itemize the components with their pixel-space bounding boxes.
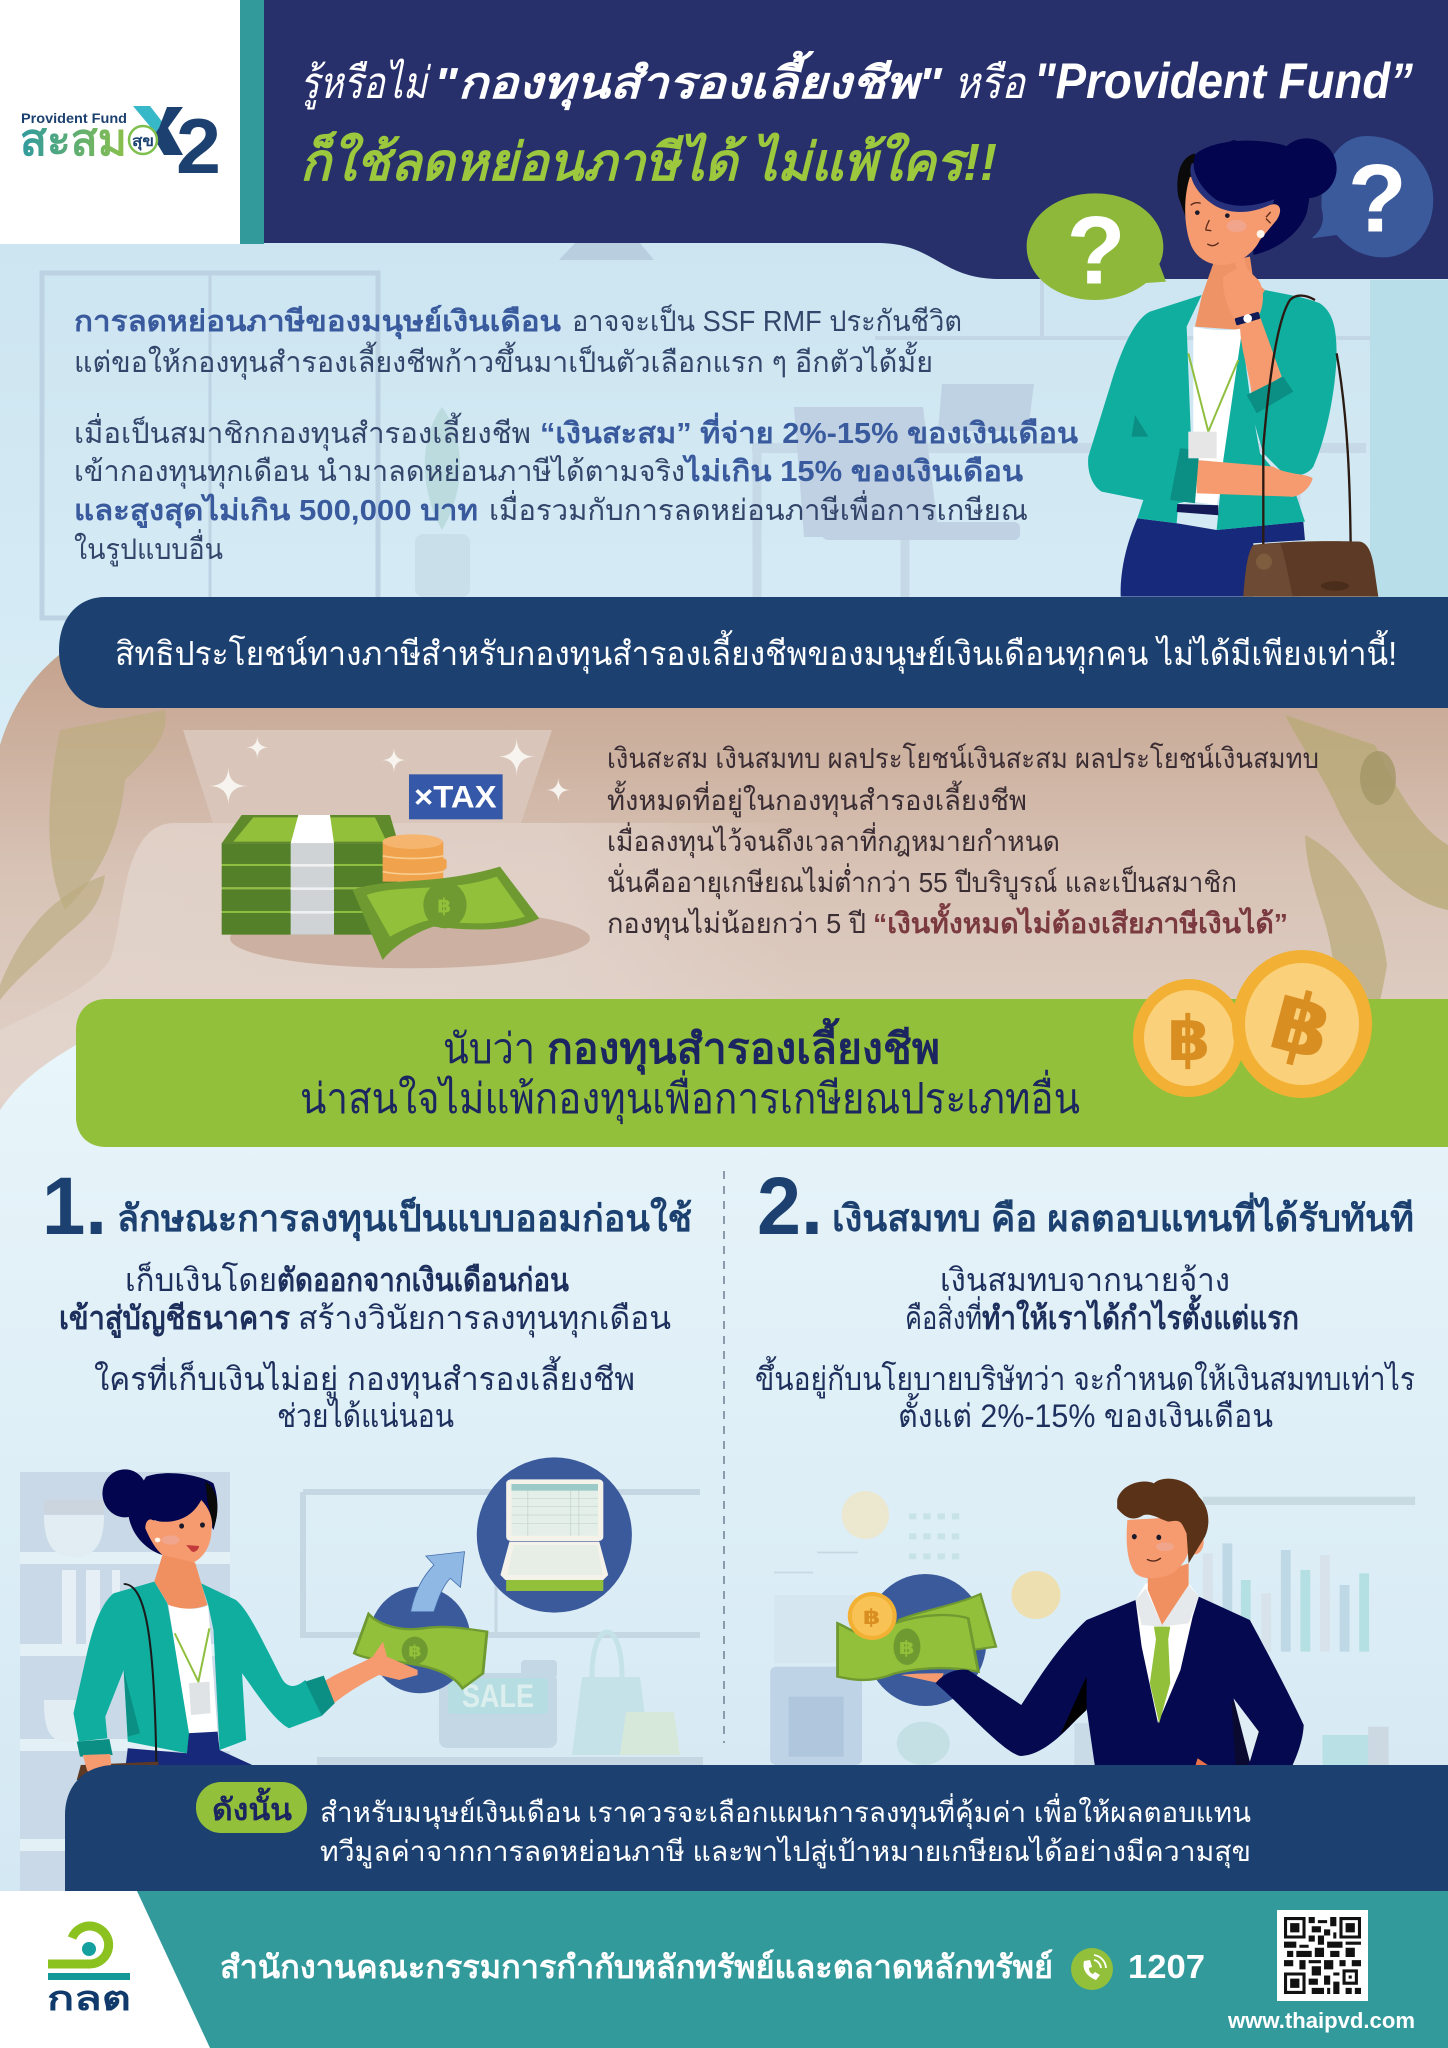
text block: intro: เข้ากองทุนทุกเดือน นำมาลดหย่อนภาษีได้ตามจริง	[74, 454, 685, 489]
column 1: body text: ใครที่เก็บเงินไม่อยู่ กองทุนสำรองเลี้ยงชีพ	[94, 1356, 635, 1399]
icon: green question bubble: ?	[1066, 197, 1126, 304]
column 2: body text	[755, 1262, 1415, 1434]
column 1: heading: ลักษณะการลงทุนเป็นแบบออมก่อนใช้	[117, 1195, 692, 1242]
icon: blue question bubble	[1312, 136, 1433, 257]
header: logo block: สะสม	[20, 116, 127, 165]
column 2: body text: เงินสมทบจากนายจ้าง	[940, 1262, 1230, 1298]
banner: tax benefits	[59, 597, 1448, 708]
callout: green conclusion band: น่าสนใจไม่แพ้กองทุนเพื่อการเกษียณประเภทอื่น	[300, 1070, 1080, 1125]
icon: gold coins: ฿	[1167, 1005, 1211, 1074]
column 2: body text: ตั้งแต่ 2%-15% ของเงินเดือน	[898, 1393, 1273, 1434]
header: navy band	[264, 0, 1448, 279]
footer: SEC logo	[0, 1891, 210, 2048]
column 1: body text: เก็บเงินโดย	[125, 1261, 277, 1298]
column 1: body text: ช่วยได้แน่นอน	[277, 1398, 454, 1434]
text block: tax-free conditions: เงินสะสม เงินสมทบ ผลประโยชน์เงินสะสม ผลประโยชน์เงินสมทบ	[607, 742, 1319, 774]
column 2: body text: คือสิ่งที่	[905, 1296, 982, 1336]
title: "กองทุนสำรองเลี้ยงชีพ"	[434, 50, 943, 111]
icon: phone	[1071, 1948, 1113, 1990]
website: www.thaipvd.com	[1227, 2008, 1415, 2033]
illustration: tax-free money: ×TAX	[414, 779, 497, 815]
illustration: tax-free money: ฿	[437, 896, 451, 918]
column 2: body text: ทำให้เราได้กำไรตั้งแต่แรก	[982, 1294, 1299, 1336]
text block: tax-free conditions: ทั้งหมดที่อยู่ในกองทุนสำรองเลี้ยงชีพ	[607, 780, 1027, 818]
text block: intro	[74, 303, 1078, 567]
footer: office name: สำนักงานคณะกรรมการกำกับหลักทรัพย์และตลาดหลักทรัพย์	[220, 1949, 1053, 1985]
text block: tax-free conditions	[607, 742, 1319, 941]
callout: green conclusion band	[76, 999, 1448, 1147]
footer: SEC logo: กลต	[47, 1980, 131, 2018]
text block: tax-free conditions: นั่นคืออายุเกษียณไม่ต่ำกว่า 55 ปีบริบูรณ์ และเป็นสมาชิก	[607, 863, 1237, 900]
header: logo block	[0, 0, 240, 244]
background: brown money band	[0, 655, 1448, 1147]
header: logo block: Provident Fund	[21, 110, 127, 126]
column 1: heading	[42, 1161, 692, 1252]
text block: intro: อาจจะเป็น SSF RMF ประกันชีวิต	[572, 303, 962, 338]
icon: blue question bubble: ?	[1348, 146, 1407, 253]
title	[300, 50, 1413, 192]
callout: green conclusion band: นับว่า	[443, 1025, 535, 1072]
illustration: woman with bank book: ฿	[408, 1642, 422, 1660]
icon: green question bubble	[1027, 193, 1166, 304]
column 1: body text: สร้างวินัยการลงทุนทุกเดือน	[298, 1300, 671, 1338]
text block: tax-free conditions: “เงินทั้งหมดไม่ต้องเสียภาษีเงินได้”	[873, 902, 1288, 939]
hotline number: 1207	[1128, 1948, 1205, 1985]
text block: intro: ไม่เกิน 15% ของเงินเดือน	[682, 454, 1023, 488]
footer band	[0, 1891, 1448, 2048]
text block: intro: และสูงสุดไม่เกิน 500,000 บาท	[74, 493, 478, 528]
text block: tax-free conditions: กองทุนไม่น้อยกว่า 5 ปี	[607, 908, 866, 941]
title: หรือ	[954, 59, 1026, 108]
header: logo block: 2	[176, 102, 221, 190]
illustration: man offering money: ฿	[899, 1638, 915, 1658]
illustration: woman with bank book	[73, 1457, 632, 1780]
column 2: heading: 2.	[757, 1161, 823, 1252]
callout: therefore box	[65, 1765, 1448, 1891]
callout: green conclusion band: กองทุนสำรองเลี้ยงชีพ	[547, 1017, 940, 1075]
header: logo block: สุข	[132, 133, 154, 151]
icon: gold coins: ฿	[1261, 972, 1342, 1078]
column 1: body text: ตัดออกจากเงินเดือนก่อน	[277, 1262, 569, 1298]
column 1: body text: เข้าสู่บัญชีธนาคาร	[59, 1300, 290, 1339]
text block: intro: การลดหย่อนภาษีของมนุษย์เงินเดือน	[74, 304, 561, 339]
title: "Provident Fund”	[1034, 53, 1413, 109]
illustration: tax-free money	[209, 736, 590, 968]
pill: label: ดังนั้น	[212, 1787, 293, 1827]
QR code	[1277, 1910, 1368, 2001]
illustration: man offering money	[838, 1479, 1304, 1765]
background: office panel	[0, 240, 1448, 960]
text block: tax-free conditions: เมื่อลงทุนไว้จนถึงเวลาที่กฎหมายกำหนด	[607, 822, 1060, 859]
banner: tax benefits: สิทธิประโยชน์ทางภาษีสำหรับกองทุนสำรองเลี้ยงชีพของมนุษย์เงินเดือนทุกคน ไม่ได้มีเพียงเท่านี้!	[115, 630, 1397, 674]
pill: label	[196, 1782, 307, 1833]
column 1: heading: 1.	[42, 1161, 107, 1252]
illustration: man offering money: ฿	[863, 1605, 880, 1628]
title: รู้หรือไม่	[300, 58, 431, 110]
text block: intro: เมื่อเป็นสมาชิกกองทุนสำรองเลี้ยงชีพ	[74, 412, 531, 451]
text block: intro: ในรูปแบบอื่น	[74, 529, 223, 567]
text block: intro: “เงินสะสม” ที่จ่าย 2%-15% ของเงินเดือน	[540, 412, 1078, 450]
column 1: body text	[59, 1261, 671, 1434]
background: lower shop panel: SALE	[462, 1678, 534, 1714]
header: teal stripe	[240, 0, 264, 244]
text block: intro: แต่ขอให้กองทุนสำรองเลี้ยงชีพก้าวขึ้นมาเป็นตัวเลือกแรก ๆ อีกตัวได้มั้ย	[74, 341, 933, 380]
background: lower shop panel	[0, 1045, 1448, 1891]
text block: intro: เมื่อรวมกับการลดหย่อนภาษีเพื่อการเกษียณ	[489, 490, 1028, 527]
background: office behind man	[770, 1491, 1415, 1765]
callout: therefore box: สำหรับมนุษย์เงินเดือน เราควรจะเลือกแผนการลงทุนที่คุ้มค่า เพื่อให้ผลตอบแทน	[320, 1793, 1251, 1830]
title: ก็ใช้ลดหย่อนภาษีได้ ไม่แพ้ใคร!!	[300, 131, 997, 192]
icon: gold coins	[1133, 950, 1372, 1098]
column 2: heading	[757, 1161, 1414, 1252]
illustration: thinking woman	[1088, 138, 1378, 597]
callout: therefore box: ทวีมูลค่าจากการลดหย่อนภาษี และพาไปสู่เป้าหมายเกษียณได้อย่างมีความสุข	[320, 1836, 1251, 1869]
column 2: heading: เงินสมทบ คือ ผลตอบแทนที่ได้รับทันที	[832, 1192, 1414, 1239]
